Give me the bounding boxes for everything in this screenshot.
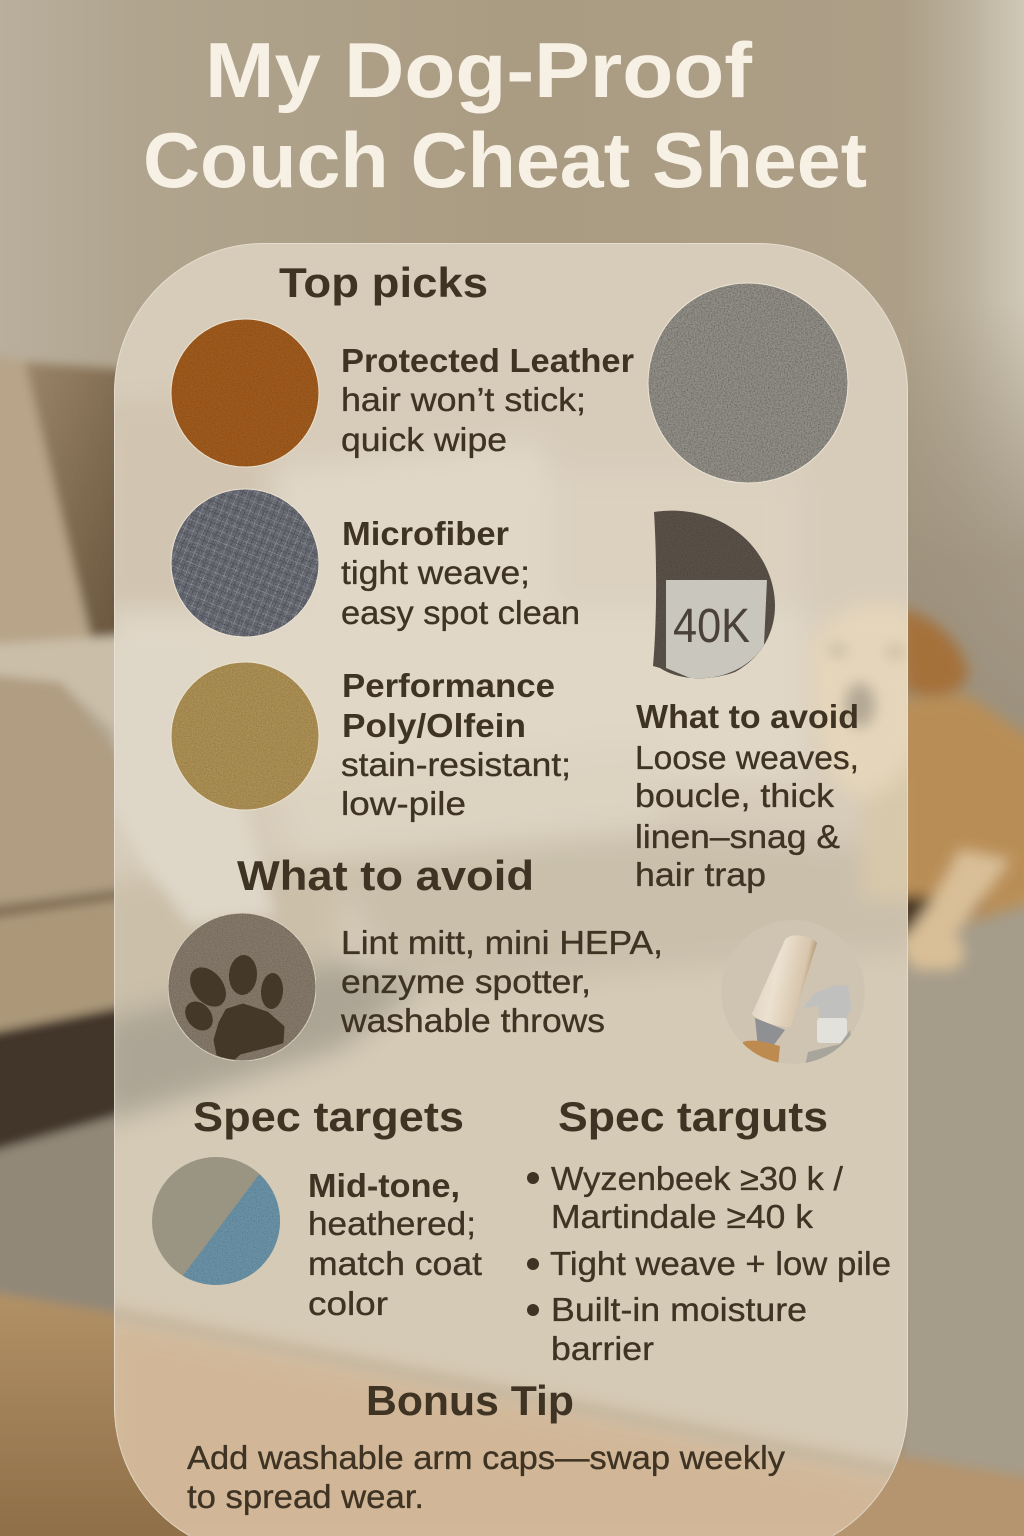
text: mid-tone — [308, 1167, 482, 1322]
heading: spec targets: Spec targets — [193, 1093, 464, 1140]
swatch: leather — [171, 319, 319, 467]
text: performance poly/olefin: low-pile — [341, 785, 466, 822]
swatch: grey fabric — [648, 283, 848, 483]
text: kit list: washable throws — [340, 1002, 605, 1039]
text: microfiber: Microfiber — [342, 515, 509, 552]
text: bonus tip: Add washable arm caps—swap weekly — [187, 1439, 786, 1476]
text: performance poly/olefin: stain-resistant; — [341, 746, 571, 783]
text: microfiber: tight weave; — [341, 554, 530, 591]
heading: bonus tip: Bonus Tip — [366, 1377, 574, 1424]
text: performance poly/olefin: Poly/Olfein — [342, 707, 526, 744]
text: mid-tone: color — [308, 1285, 388, 1322]
icon: cleaning bottles — [743, 935, 852, 1063]
text: kit list: Lint mitt, mini HEPA, — [341, 924, 663, 961]
text: bonus tip: to spread wear. — [187, 1478, 424, 1515]
dog outside panel — [895, 610, 1024, 970]
text: what to avoid (right column): What to avoid — [636, 698, 859, 735]
text: mid-tone: Mid-tone, — [308, 1167, 460, 1204]
text: what to avoid (right column): Loose weaves, — [635, 739, 859, 776]
text: bonus tip — [187, 1439, 786, 1515]
swatch: performance poly/olefin — [171, 662, 319, 810]
title: Couch Cheat Sheet — [143, 116, 867, 204]
text: what to avoid (right column): linen–snag & — [635, 818, 840, 855]
title: My Dog-Proof — [205, 26, 753, 114]
spec bullet list: Built-in moisture — [551, 1291, 807, 1328]
spec bullet list: Martindale ≥40 k — [551, 1198, 814, 1235]
text: protected leather: quick wipe — [341, 421, 507, 458]
spec bullet list — [527, 1160, 891, 1367]
text: performance poly/olefin: Performance — [342, 667, 555, 704]
text: kit list: enzyme spotter, — [341, 963, 591, 1000]
text: protected leather: hair won’t stick; — [341, 381, 586, 418]
text: microfiber: easy spot clean — [341, 594, 580, 631]
heading: what to avoid: What to avoid — [237, 852, 534, 899]
swatch: 40K durability: 40K — [673, 600, 750, 653]
text: mid-tone: match coat — [308, 1245, 482, 1282]
heading: top picks: Top picks — [279, 259, 488, 306]
icon: paw print — [168, 913, 316, 1061]
spec bullet list: Tight weave + low pile — [550, 1245, 891, 1282]
text: what to avoid (right column) — [635, 698, 859, 893]
text: protected leather: Protected Leather — [341, 342, 634, 379]
title — [143, 26, 867, 204]
frosted panel — [100, 243, 925, 1536]
text: performance poly/olefin — [341, 667, 571, 822]
swatch: microfiber — [171, 489, 319, 637]
spec bullet list: Wyzenbeek ≥30 k / — [551, 1160, 844, 1197]
text: microfiber — [341, 515, 580, 631]
text: protected leather — [341, 342, 634, 458]
text: mid-tone: heathered; — [308, 1205, 476, 1242]
heading: spec targuts: Spec targuts — [558, 1093, 828, 1140]
spec bullet list: barrier — [551, 1330, 654, 1367]
text: what to avoid (right column): boucle, thick — [635, 777, 835, 814]
text: kit list — [340, 924, 663, 1039]
swatch: colour split — [152, 1157, 280, 1285]
swatch: 40K durability — [653, 511, 775, 678]
text: what to avoid (right column): hair trap — [635, 856, 766, 893]
